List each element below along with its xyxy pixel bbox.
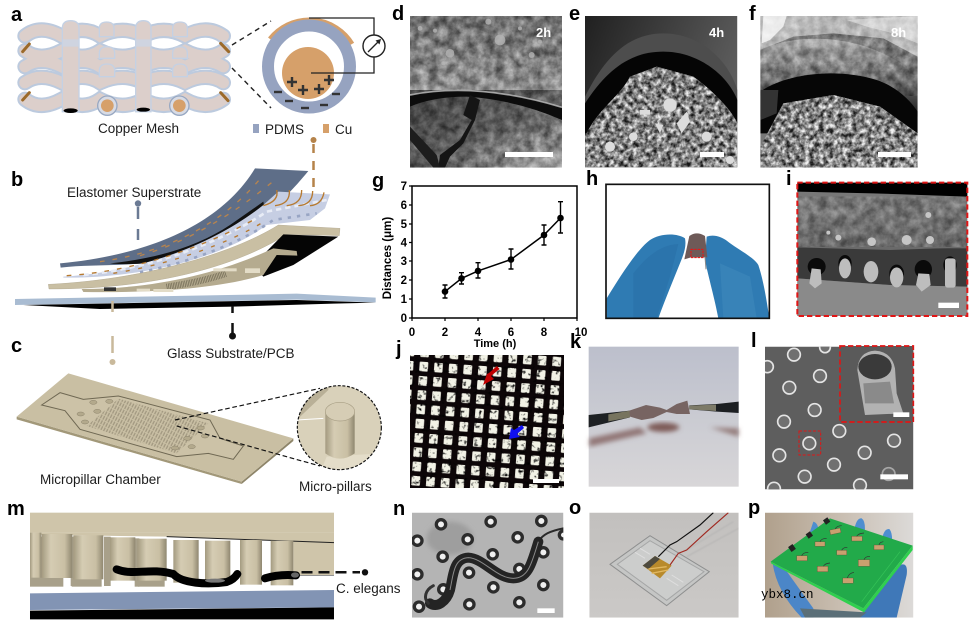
y tick labels: 1: [401, 294, 408, 306]
panel letter b: b: [11, 169, 23, 191]
y axis title: Distances (μm): [382, 217, 394, 299]
micrograph n: [412, 513, 567, 618]
panel d: SEM 2h: [392, 3, 562, 168]
chamber plate: [17, 373, 320, 484]
scale bar j: [533, 479, 559, 483]
panel i: SEM cross-section of pillars: [786, 168, 967, 316]
exploded layer stack: [15, 168, 376, 309]
x axis title: Time (h): [474, 338, 517, 350]
copper mesh woven illustration: [23, 21, 229, 115]
x tick labels: [409, 327, 587, 339]
panel letter g: g: [372, 170, 384, 192]
elastomer leader pin: [135, 200, 141, 240]
glass substrate: [15, 294, 376, 305]
photo k: [589, 347, 739, 487]
label 2h: 2h: [536, 25, 551, 40]
watermark ybx8.cn: ybx8.cn: [761, 588, 814, 602]
y tick labels: 2: [401, 275, 407, 287]
panel n: worm micrograph: [393, 498, 567, 618]
panel letter m: m: [7, 498, 25, 520]
panel j: mesh micrograph: [395, 338, 564, 488]
data line: [445, 218, 560, 292]
panel letter j: j: [395, 338, 402, 360]
small chamber details: [137, 268, 260, 292]
panel b: exploded device layers: [11, 168, 376, 361]
panel m: worm among pillars schematic: [7, 498, 401, 619]
worm leader: [302, 569, 368, 576]
copper mesh layer: [63, 192, 330, 278]
panel letter d: d: [392, 3, 404, 25]
label: Micropillar Chamber: Micropillar Chamber: [40, 472, 161, 487]
micrograph j: [410, 355, 564, 488]
beige micropillar layer: [48, 225, 340, 289]
photo p: [765, 513, 913, 618]
label: Micro-pillars: Micro-pillars: [299, 479, 372, 494]
copper leader pin: [310, 137, 316, 192]
label: Copper Mesh: Copper Mesh: [98, 121, 179, 136]
axis ticks: [409, 186, 577, 321]
inner chamber with pillars: [82, 248, 297, 292]
panel p: PCB held by gloves: [748, 497, 913, 618]
panel c: micropillar chamber: [11, 335, 382, 494]
panel l: SEM of micropillar array: [751, 330, 913, 495]
panel letter p: p: [748, 497, 760, 519]
small dark component: [104, 287, 116, 291]
panel letter i: i: [786, 168, 792, 190]
scale bar f: [878, 152, 911, 157]
SEM image i: [797, 183, 967, 316]
y tick labels: 0: [401, 313, 407, 325]
legend: PDMS and Cu: Cu: [335, 122, 352, 137]
label 8h: 8h: [891, 25, 906, 40]
y tick labels: [401, 181, 408, 325]
x tick labels: 8: [541, 327, 548, 339]
label: Elastomer Superstrate: Elastomer Superstrate: [67, 185, 201, 200]
legend: PDMS and Cu: PDMS: [265, 122, 304, 137]
x tick labels: 10: [575, 327, 587, 339]
y tick labels: 7: [401, 181, 407, 193]
pillar ticks: [167, 273, 227, 287]
red arrow: [483, 366, 500, 385]
panel f: SEM 8h: [749, 3, 918, 168]
black leader pin: [229, 306, 236, 340]
panel letter h: h: [586, 168, 598, 190]
panel letter a: a: [11, 4, 23, 26]
x tick labels: 4: [475, 327, 482, 339]
error bars: [442, 202, 563, 298]
panel letter k: k: [570, 331, 582, 353]
glass shadow: [23, 300, 376, 309]
y tick labels: 4: [401, 238, 408, 250]
zoom circle: micro-pillar: [297, 383, 382, 473]
panel letter f: f: [749, 3, 756, 25]
panel h: bent device held by gloves: [586, 168, 769, 318]
label 4h: 4h: [709, 25, 724, 40]
y tick labels: 3: [401, 256, 407, 268]
panel e: SEM 4h: [569, 3, 737, 167]
axes box: [412, 186, 577, 318]
panel letter e: e: [569, 3, 580, 25]
SEM image f: [760, 16, 918, 168]
x tick labels: 0: [409, 327, 415, 339]
blue arrow: [509, 425, 524, 439]
cross-section of wire with meter: [268, 18, 385, 108]
panel letter l: l: [751, 330, 757, 352]
beige leader dot: [110, 359, 116, 365]
panel letter c: c: [11, 335, 22, 357]
beige leader: [111, 301, 114, 353]
y tick labels: 6: [401, 200, 407, 212]
photo o: [589, 513, 739, 618]
label: C. elegans: C. elegans: [336, 581, 401, 596]
copper flecks on sheet: [100, 175, 277, 262]
label: Glass Substrate/PCB: Glass Substrate/PCB: [167, 346, 295, 361]
shadow below beige layer: [253, 234, 338, 277]
zoom lines to cross-section: [232, 21, 271, 108]
panel letter n: n: [393, 498, 405, 520]
inset pillar: [840, 346, 913, 422]
scale bar e: [700, 152, 724, 157]
x tick labels: 6: [508, 327, 514, 339]
copper arcs in mesh: [67, 190, 324, 276]
SEM image e: [585, 16, 737, 167]
mesh layer texture: [83, 200, 327, 275]
legend: PDMS and Cu: [253, 122, 352, 137]
elastomer sheet: [60, 168, 308, 268]
panel a: copper mesh and cross-section: [11, 4, 385, 192]
x tick labels: 2: [442, 327, 448, 339]
panel o: chip with wires photo: [569, 497, 739, 618]
side-view chamber: [30, 513, 334, 619]
SEM image l: [761, 342, 913, 495]
black gap: [110, 202, 267, 264]
panel k: twisted device photo: [570, 331, 739, 487]
panel letter o: o: [569, 497, 581, 519]
photo h: [606, 184, 769, 318]
y tick labels: 5: [401, 219, 408, 231]
scale bar d: [505, 152, 553, 157]
SEM image d: [410, 16, 562, 168]
panel g: distance vs time line chart: [372, 170, 587, 350]
data points: [442, 215, 564, 295]
